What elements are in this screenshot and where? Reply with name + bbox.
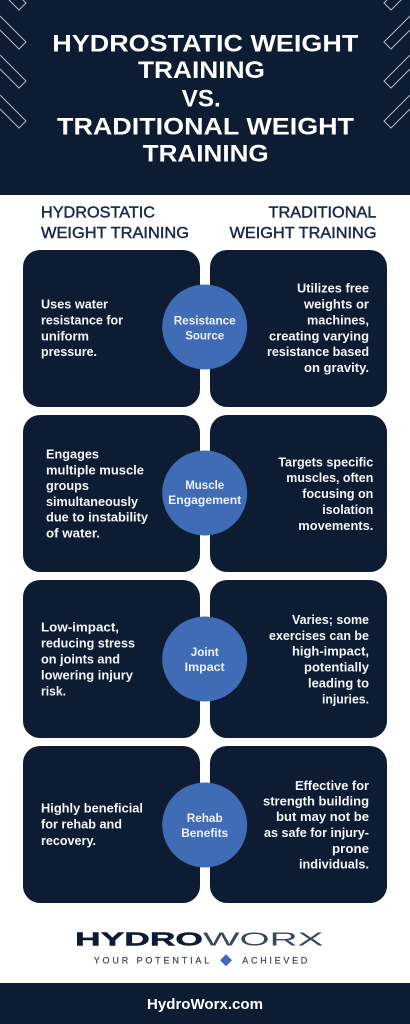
wordmark: HYDRO — [75, 929, 203, 950]
icon: diamond — [220, 954, 232, 966]
circle label: Joint — [191, 645, 219, 659]
row: joint impact — [23, 580, 387, 738]
right card: focusing on — [302, 486, 373, 501]
title: HYDROSTATIC WEIGHT — [52, 30, 358, 58]
circle label: Source — [185, 328, 225, 342]
left card: simultaneously — [46, 494, 139, 509]
right card: isolation — [322, 502, 373, 517]
right card: creating varying — [269, 328, 369, 344]
left card: multiple muscle — [46, 462, 144, 478]
circle label — [162, 616, 247, 702]
right card: weights or — [303, 296, 369, 312]
left card: uniform — [41, 328, 89, 344]
right card: strength building — [263, 794, 369, 808]
left card: resistance for — [41, 312, 123, 328]
right card: high-impact, — [292, 644, 369, 658]
left card — [23, 250, 200, 407]
decorative stripes left — [0, 0, 26, 128]
column heading: traditional: WEIGHT TRAINING — [230, 225, 376, 242]
right card: individuals. — [299, 856, 369, 872]
left card: recovery. — [41, 833, 96, 848]
right card: prone — [332, 841, 369, 856]
title: TRAINING — [138, 57, 265, 84]
right card — [210, 250, 387, 407]
right card — [210, 746, 387, 903]
circle label: Resistance — [174, 314, 236, 328]
logo — [75, 929, 324, 966]
left card: on joints and — [41, 652, 120, 666]
left card — [23, 415, 200, 572]
right card: movements. — [298, 518, 373, 533]
circle label — [162, 450, 247, 536]
right card — [210, 580, 387, 738]
title — [52, 30, 358, 168]
footer band — [0, 983, 410, 1024]
title: TRADITIONAL WEIGHT — [57, 114, 354, 140]
right card — [210, 415, 387, 572]
decorative stripes right — [384, 0, 410, 128]
left card: lowering injury — [41, 668, 134, 682]
right card: on gravity. — [304, 360, 369, 375]
right card: Targets specific — [278, 454, 373, 470]
circle label: Engagement — [168, 493, 241, 507]
right card: resistance based — [267, 344, 369, 359]
right card: Utilizes free — [297, 280, 369, 296]
tagline: ACHIEVED — [242, 956, 308, 966]
column heading: traditional: TRADITIONAL — [268, 204, 377, 222]
circle label: Benefits — [181, 826, 229, 840]
column heading: traditional — [230, 204, 377, 242]
circle label: Muscle — [185, 478, 225, 492]
row: rehab benefits — [23, 746, 387, 903]
circle label — [162, 782, 247, 868]
title: VS. — [182, 86, 221, 112]
column heading: hydrostatic — [41, 204, 189, 242]
column heading: hydrostatic: HYDROSTATIC — [41, 204, 155, 222]
right card: potentially — [304, 660, 370, 674]
column heading: hydrostatic: WEIGHT TRAINING — [41, 225, 189, 242]
wordmark: WORX — [203, 929, 324, 950]
right card: injuries. — [322, 692, 369, 706]
circle label: Impact — [185, 660, 225, 674]
left card — [23, 746, 200, 903]
left card: Uses water — [41, 296, 108, 312]
wordmark — [75, 929, 324, 950]
right card: leading to — [308, 676, 369, 690]
right card: exercises can be — [269, 628, 369, 643]
left card: pressure. — [41, 344, 97, 359]
row: resistance source — [23, 250, 387, 407]
left card: of water. — [46, 526, 100, 540]
left card: Highly beneficial — [41, 800, 143, 816]
left card: for rehab and — [41, 816, 122, 832]
circle label: Rehab — [187, 811, 223, 825]
row: muscle engagement — [23, 415, 387, 572]
footer band: HydroWorx.com — [147, 996, 263, 1013]
right card: but may not be — [276, 809, 369, 824]
right card: muscles, often — [286, 470, 373, 485]
left card: risk. — [41, 684, 66, 698]
circle label — [162, 284, 247, 370]
title: TRAINING — [143, 140, 269, 168]
right card: machines, — [307, 312, 369, 328]
left card: groups — [46, 478, 89, 493]
left card: due to instability — [46, 510, 149, 524]
left card — [23, 580, 200, 738]
tagline: YOUR POTENTIAL — [94, 956, 209, 966]
left card: Low-impact, — [41, 620, 119, 634]
header band — [0, 0, 410, 195]
tagline — [94, 956, 308, 966]
right card: as safe for injury- — [264, 825, 369, 840]
left card: reducing stress — [41, 636, 135, 650]
right card: Varies; some — [292, 612, 369, 627]
left card: Engages — [46, 446, 99, 462]
right card: Effective for — [295, 778, 369, 793]
